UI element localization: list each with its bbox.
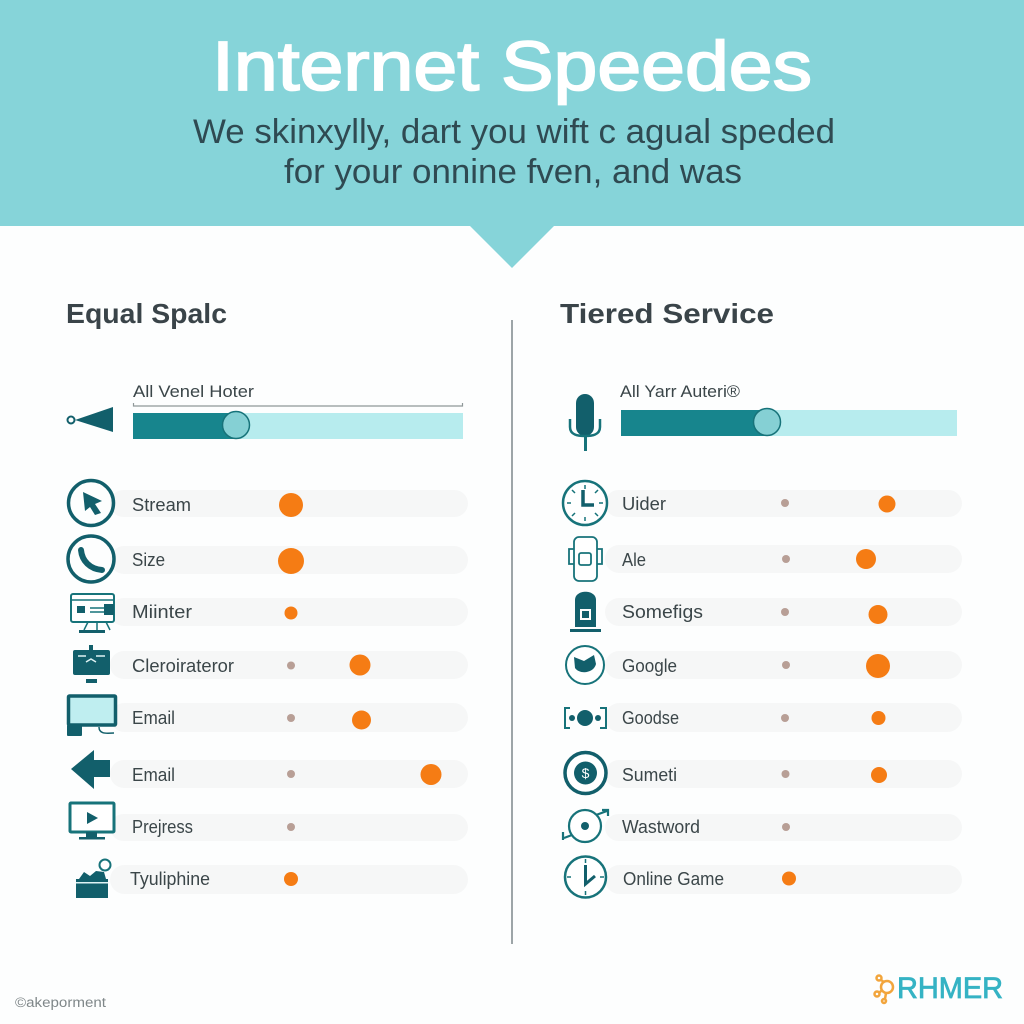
row: Tyuliphine	[76, 860, 468, 898]
row: Prejress	[70, 803, 468, 841]
subtitle	[193, 113, 835, 191]
heading: Tiered Service: Tiered Service	[560, 298, 774, 329]
row: Google	[566, 646, 962, 684]
row: Uider: Uider	[622, 494, 666, 514]
footer copyright: ©akeporment	[15, 995, 106, 1010]
row: Stream: Stream	[132, 495, 191, 515]
row: Miinter: Miinter	[132, 602, 192, 622]
icon: microphone	[570, 394, 600, 451]
row: Sumeti: Sumeti	[622, 765, 677, 785]
subtitle: We skinxylly, dart you wift c agual speded	[193, 113, 835, 151]
row: Clerorator: Cleroirateror	[132, 656, 234, 676]
logo mark	[874, 976, 893, 1003]
row: Wastword: Wastword	[622, 817, 700, 837]
row: Email monitor: Email	[132, 708, 175, 728]
row: Tyuliphine: Tyuliphine	[130, 869, 210, 889]
logo wordmark: RHMER	[897, 972, 1003, 1005]
center divider	[511, 320, 513, 944]
row: Size: Size	[132, 550, 165, 570]
row: Ale: Ale	[622, 550, 646, 570]
row: Uider	[563, 481, 962, 525]
row: Somefigs: Somefigs	[622, 602, 703, 622]
row: Somefigs	[570, 592, 962, 632]
title: Internet Speedes	[212, 27, 812, 105]
speed bar left	[133, 412, 463, 439]
subtitle: for your onnine fven, and was	[284, 153, 742, 191]
panel: equal speed left	[67, 382, 468, 898]
logo	[874, 972, 1003, 1005]
row: Stream	[68, 480, 468, 526]
speed bar scale line	[134, 403, 462, 406]
row: Sumeti: $	[582, 765, 590, 781]
header banner	[0, 0, 1024, 268]
row: Ale	[569, 537, 962, 581]
heading: Equal Spalc: Equal Spalc	[66, 298, 227, 329]
row: Email arrow	[71, 750, 468, 789]
row: Online Game: Online Game	[623, 869, 724, 889]
row: Google: Google	[622, 656, 677, 676]
row: Email arrow: Email	[132, 765, 175, 785]
panel: tiered service right	[563, 382, 962, 898]
speed bar label: All Venel Hoter	[133, 382, 254, 401]
row: Goodse	[565, 703, 962, 732]
row: Online Game	[565, 856, 962, 898]
icon: megaphone cone	[68, 407, 113, 432]
row: Miinter	[71, 594, 468, 633]
row: Clerorator	[73, 645, 468, 683]
row: Wastword	[563, 810, 962, 842]
row: Prejress: Prejress	[132, 817, 193, 837]
speed bar right	[621, 408, 957, 436]
row: Sumeti	[565, 752, 962, 794]
speed bar label: All Yarr Auteri®	[620, 382, 740, 401]
row: Email monitor	[67, 696, 468, 736]
row: Goodse: Goodse	[622, 708, 679, 728]
row: Size	[68, 536, 468, 582]
